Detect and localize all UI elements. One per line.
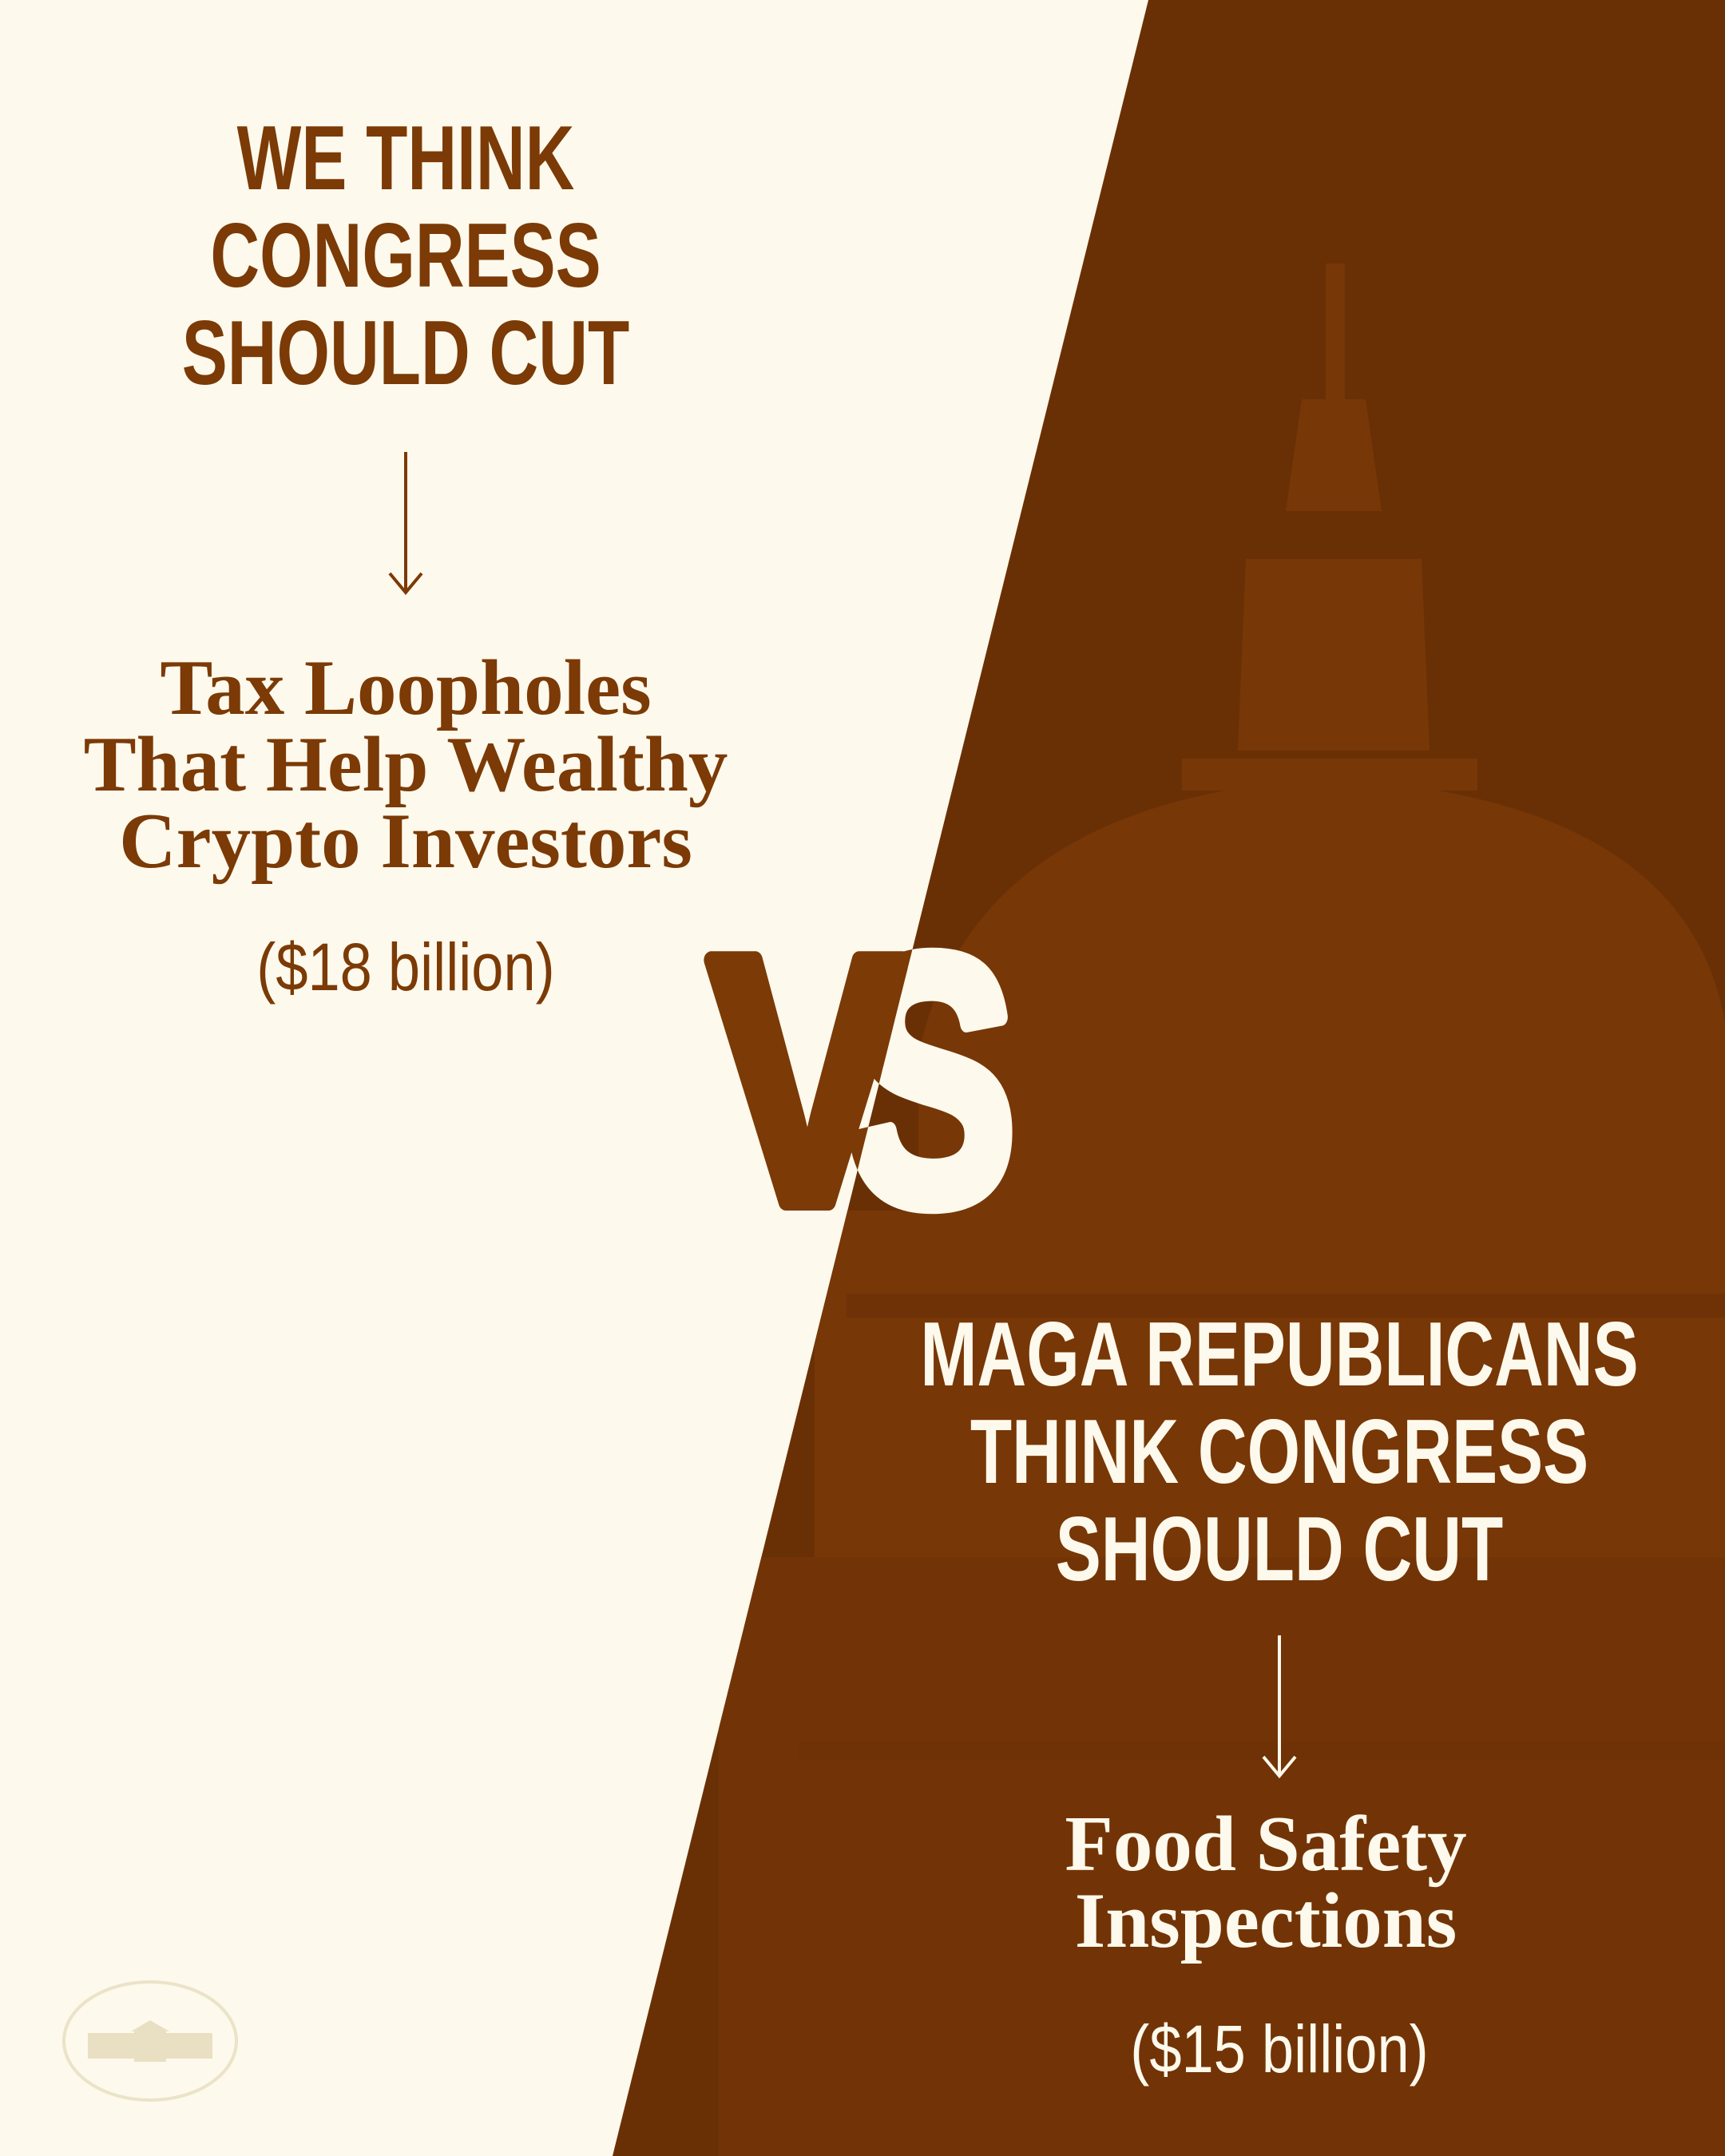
left amount: ($18 billion) (256, 929, 555, 1005)
right arrow (1262, 1635, 1297, 1778)
capitol image (719, 264, 1725, 1729)
VS (704, 947, 1013, 1214)
VS: S (848, 885, 1016, 1277)
right item text: Inspections (1075, 1877, 1457, 1964)
background split (613, 0, 1725, 2156)
left item text: Crypto Investors (119, 798, 692, 885)
left item text (84, 644, 728, 885)
left item text: That Help Wealthy (84, 721, 728, 808)
left heading: SHOULD CUT (182, 303, 629, 404)
right heading (920, 1304, 1639, 1600)
right item text: Food Safety (1065, 1801, 1467, 1888)
left heading (182, 108, 629, 404)
left arrow (388, 452, 423, 595)
VS: V (709, 885, 906, 1277)
left item text: Tax Loopholes (160, 644, 652, 731)
right heading: THINK CONGRESS (970, 1401, 1588, 1503)
logo: white house seal (62, 1980, 238, 2102)
left heading: CONGRESS (210, 205, 601, 307)
right heading: SHOULD CUT (1056, 1499, 1503, 1600)
VS: S (848, 885, 1016, 1277)
right item text (1065, 1801, 1467, 1964)
right heading: MAGA REPUBLICANS (920, 1304, 1639, 1405)
left heading: WE THINK (237, 108, 574, 209)
right amount: ($15 billion) (1130, 2011, 1429, 2087)
